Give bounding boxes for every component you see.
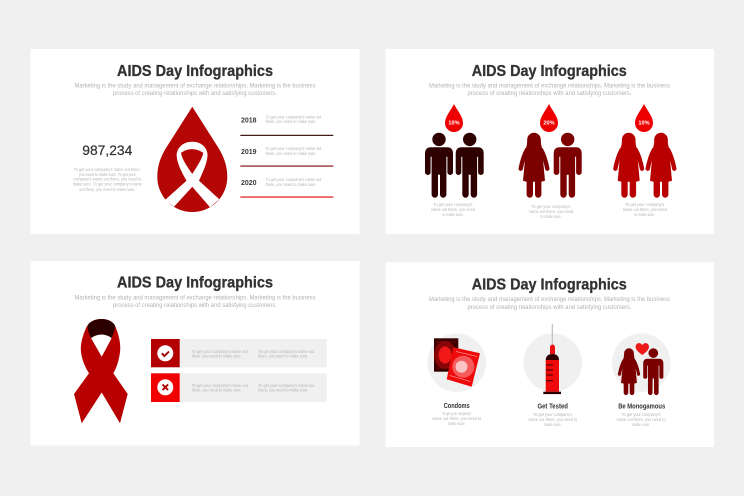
item: be monogamous: make sure. bbox=[632, 422, 650, 427]
item: get tested bbox=[523, 324, 582, 427]
subtitle: process of creating relationships with and satisfying customers. bbox=[468, 304, 632, 311]
panel: prevention bbox=[386, 262, 714, 447]
item: condoms bbox=[427, 333, 486, 426]
subtitle: Marketing is the study and management of exchange relationships. Marketing is the business bbox=[429, 82, 671, 90]
group 2: woman and man, 20% bbox=[521, 104, 582, 219]
panel: people percentages bbox=[386, 49, 714, 234]
subtitle: Marketing is the study and management of exchange relationships. Marketing is the business bbox=[429, 296, 671, 303]
subtitle bbox=[429, 296, 671, 311]
group 3: two women, 10%: name out there, you need bbox=[623, 207, 667, 212]
item: get tested: name out there, you need to bbox=[528, 417, 578, 422]
year row 2019: To get your company's name out bbox=[266, 146, 322, 151]
item: get tested: To get your company's bbox=[533, 412, 573, 417]
year row 2018: 2018 bbox=[241, 118, 257, 124]
row: cross: there, you need to make sure. bbox=[192, 388, 242, 392]
item: be monogamous bbox=[612, 333, 671, 427]
subtitle: process of creating relationships with and satisfying customers. bbox=[113, 90, 277, 97]
item: condoms: Condoms bbox=[444, 403, 470, 410]
row: check bbox=[151, 339, 327, 367]
subtitle bbox=[74, 294, 316, 309]
item: condoms: name out there, you need to bbox=[432, 416, 482, 421]
row: check: there, you need to make sure. bbox=[258, 354, 308, 358]
title: AIDS Day Infographics bbox=[117, 63, 273, 80]
subtitle: Marketing is the study and management of exchange relationships. Marketing is the business bbox=[74, 82, 316, 90]
item: get tested: Get Tested bbox=[537, 404, 568, 410]
year row 2019: there, you need to make sure. bbox=[266, 151, 316, 156]
year row 2019 bbox=[240, 146, 333, 167]
statistic description: you need to make sure. To get your bbox=[79, 172, 136, 177]
item: condoms: To get your company's bbox=[442, 411, 472, 416]
year row 2020: 2020 bbox=[241, 180, 257, 187]
group 1: two men, 10%: name out there, you need bbox=[431, 207, 475, 212]
group 3: two women, 10% bbox=[615, 104, 674, 217]
statistic description: company's name out there, you need to bbox=[73, 177, 142, 182]
row: check: there, you need to make sure. bbox=[192, 354, 242, 358]
group 3: two women, 10%: 10% bbox=[638, 120, 650, 126]
row: check: To get your company's name out bbox=[192, 349, 248, 354]
title: AIDS Day Infographics bbox=[472, 63, 627, 80]
subtitle bbox=[74, 82, 316, 97]
icon: awareness ribbon bbox=[74, 319, 128, 423]
row: cross: To get your company's name out bbox=[258, 383, 315, 388]
panel: ribbon in blood drop bbox=[30, 49, 360, 234]
panel: ribbon with do and don't rows bbox=[30, 261, 360, 446]
item: get tested: make sure. bbox=[544, 422, 562, 427]
year row 2018: there, you need to make sure. bbox=[266, 119, 316, 124]
group 1: two men, 10%: To get your company's bbox=[434, 202, 473, 207]
item: be monogamous: To get your company's bbox=[622, 412, 661, 417]
row: cross: there, you need to make sure. bbox=[258, 388, 308, 392]
year row 2019: 2019 bbox=[241, 149, 257, 156]
row: cross bbox=[151, 373, 327, 402]
group 3: two women, 10%: to make sure. bbox=[634, 212, 655, 217]
statistic description: out there, you need to make sure. bbox=[79, 187, 135, 192]
group 2: woman and man, 20%: To get your company's bbox=[532, 204, 571, 209]
year row 2020 bbox=[240, 177, 333, 198]
subtitle: process of creating relationships with and satisfying customers. bbox=[113, 302, 277, 309]
group 1: two men, 10%: 10% bbox=[448, 120, 460, 126]
statistic description: make sure. To get your company's name bbox=[73, 182, 142, 187]
title: AIDS Day Infographics bbox=[472, 276, 627, 293]
row: cross: To get your company's name out bbox=[192, 383, 248, 388]
group 2: woman and man, 20%: 20% bbox=[543, 120, 555, 126]
subtitle: process of creating relationships with and satisfying customers. bbox=[468, 90, 632, 97]
year row 2018 bbox=[240, 114, 333, 136]
subtitle bbox=[429, 82, 671, 97]
statistic description: To get your company's name out there, bbox=[74, 167, 141, 172]
item: be monogamous: Be Monogamous bbox=[618, 404, 665, 410]
group 3: two women, 10%: To get your company's bbox=[625, 202, 665, 207]
item: be monogamous: name out there, you need to bbox=[616, 417, 666, 422]
title: AIDS Day Infographics bbox=[117, 274, 273, 292]
group 2: woman and man, 20%: to make sure. bbox=[540, 214, 562, 219]
year row 2018: To get your company's name out bbox=[266, 114, 322, 120]
year row 2020: To get your company's name out bbox=[266, 177, 322, 182]
row: check: To get your company's name out bbox=[258, 349, 315, 354]
group 1: two men, 10% bbox=[425, 104, 484, 217]
statistic number: 987,234 bbox=[82, 143, 133, 158]
item: condoms: make sure. bbox=[448, 421, 466, 426]
icon: blood drop with ribbon bbox=[157, 107, 227, 212]
year row 2020: there, you need to make sure. bbox=[266, 182, 316, 187]
group 1: two men, 10%: to make sure. bbox=[442, 212, 464, 217]
statistic description bbox=[73, 167, 142, 192]
group 2: woman and man, 20%: name out there, you need bbox=[529, 209, 573, 214]
subtitle: Marketing is the study and management of exchange relationships. Marketing is the business bbox=[74, 294, 316, 302]
